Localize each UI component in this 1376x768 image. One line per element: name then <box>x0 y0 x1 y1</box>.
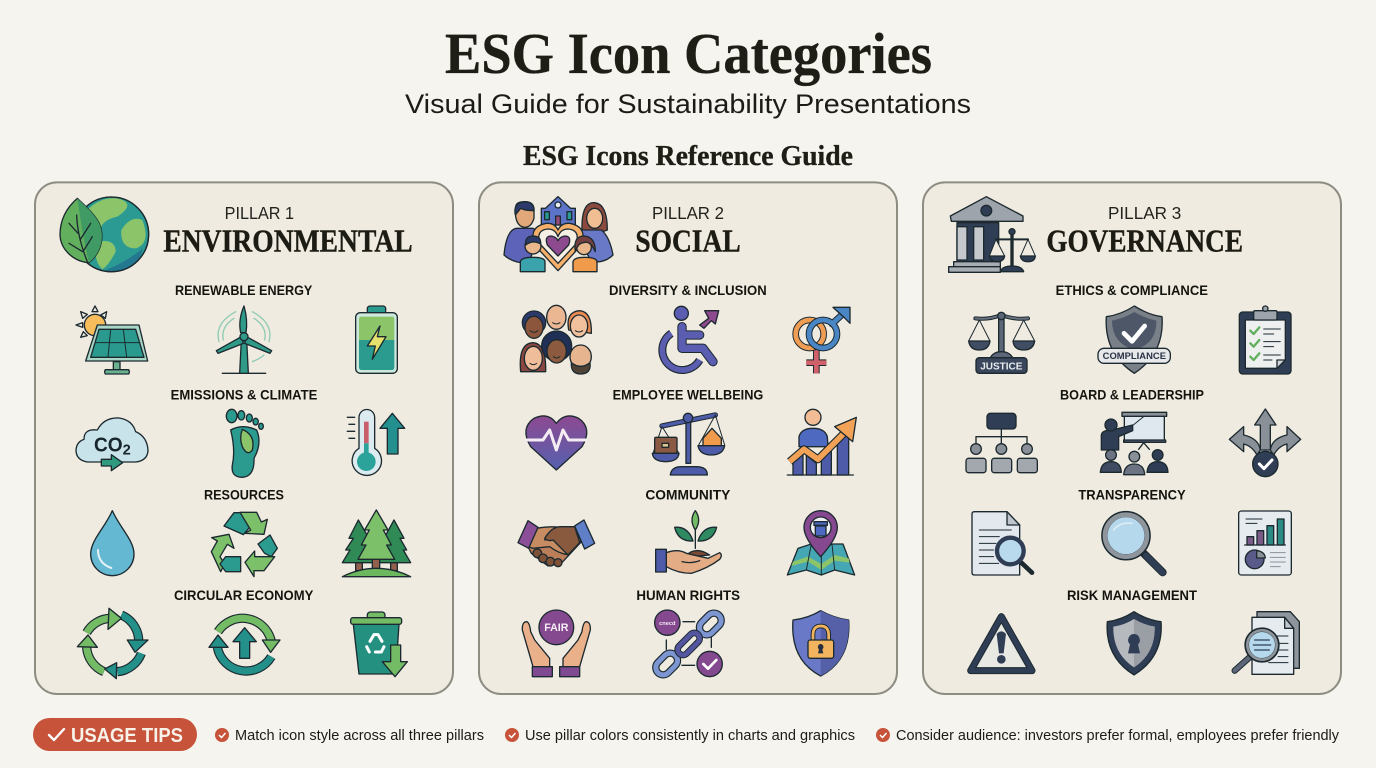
usage tips badge <box>33 718 197 751</box>
icon: co2 cloud <box>76 418 148 471</box>
subheading: diversity and inclusion: DIVERSITY & INCLUSION <box>609 283 767 298</box>
icon: justice scales: JUSTICE <box>980 362 1023 373</box>
subheading: transparency: TRANSPARENCY <box>1078 487 1186 502</box>
tip 3: Consider audience: investors prefer formal, employees prefer friendly <box>896 728 1340 744</box>
subheading: renewable energy: RENEWABLE ENERGY <box>175 283 312 298</box>
panel: social <box>479 182 897 694</box>
icon: broken chain <box>653 610 724 678</box>
icon: document review <box>972 512 1032 575</box>
icon: co2 cloud: CO <box>94 433 123 456</box>
subheading: risk management: RISK MANAGEMENT <box>1067 588 1198 603</box>
subheading: human rights: HUMAN RIGHTS <box>636 588 740 603</box>
icon: work life balance <box>652 413 725 475</box>
icon: broken chain: cnecd <box>659 621 676 627</box>
title: ESG Icon Categories <box>445 21 932 86</box>
icon: presenter and audience <box>1100 412 1168 475</box>
icon: family and community <box>504 197 613 272</box>
tip 1: Match icon style across all three pillars <box>235 728 484 744</box>
icon: secure shield <box>793 611 849 676</box>
icon: org chart <box>966 413 1037 473</box>
pillar title: ENVIRONMENTAL <box>163 223 413 258</box>
panel: environmental <box>35 182 453 694</box>
icon: gender symbols <box>796 307 850 373</box>
subheading: emissions and climate: EMISSIONS & CLIMATE <box>171 387 317 402</box>
pillar label: PILLAR 1 <box>225 203 294 223</box>
icon: heart pulse <box>526 416 587 470</box>
pillar label: PILLAR 2 <box>652 203 724 223</box>
icon: thermometer with arrow <box>347 409 405 475</box>
panel: governance <box>923 182 1341 694</box>
subtitle: Visual Guide for Sustainability Presentations <box>405 89 971 119</box>
icon: circular upcycle <box>209 618 280 671</box>
icon: water drop <box>91 511 134 576</box>
icon: compliance shield: COMPLIANCE <box>1103 351 1166 361</box>
icon: checklist clipboard <box>1239 306 1291 374</box>
icon: battery <box>356 306 397 373</box>
icon: circular arrows <box>77 608 148 679</box>
icon: seedling in hand <box>656 511 721 573</box>
icon: fair hands <box>522 610 590 677</box>
subheading: community: COMMUNITY <box>645 487 730 502</box>
pillar label: PILLAR 3 <box>1108 203 1182 223</box>
usage tips badge: USAGE TIPS <box>71 725 183 747</box>
icon: decision arrows <box>1229 409 1301 477</box>
icon: forest <box>342 510 411 577</box>
subheading: employee wellbeing: EMPLOYEE WELLBEING <box>613 387 763 402</box>
tip 2: Use pillar colors consistently in charts and graphics <box>525 728 855 744</box>
pillar title: SOCIAL <box>635 223 741 258</box>
icon: footprint <box>226 409 263 477</box>
icon: wind turbine <box>216 306 272 373</box>
icon: accessibility <box>662 306 719 370</box>
icon: diverse people <box>520 305 591 374</box>
icon: keyhole shield <box>1107 612 1161 675</box>
subheading: board and leadership: BOARD & LEADERSHIP <box>1060 387 1204 402</box>
icon: data report <box>1239 511 1291 575</box>
pillar title: GOVERNANCE <box>1046 223 1243 258</box>
icon: map pin <box>787 511 855 575</box>
icon: justice scales <box>969 312 1035 373</box>
subheading: ethics and compliance: ETHICS & COMPLIANCE <box>1056 283 1208 298</box>
icon: handshake <box>518 520 595 567</box>
icon: earth and leaf <box>60 197 149 272</box>
section heading: ESG Icons Reference Guide <box>523 140 853 172</box>
subheading: circular economy: CIRCULAR ECONOMY <box>174 588 313 603</box>
icon: growth chart <box>787 409 856 475</box>
icon: fair hands: FAIR <box>544 622 569 634</box>
icon: warning triangle <box>971 617 1032 671</box>
icon: solar panel <box>76 306 148 374</box>
subheading: resources: RESOURCES <box>204 487 284 502</box>
icon: magnifying glass <box>1104 514 1163 572</box>
icon: recycling bin <box>351 612 407 677</box>
icon: audit documents <box>1235 612 1299 674</box>
icon: recycle <box>211 512 277 577</box>
icon: institution and scales <box>949 197 1035 272</box>
icon: co2 cloud: 2 <box>123 443 131 459</box>
icon: compliance shield <box>1098 306 1170 373</box>
